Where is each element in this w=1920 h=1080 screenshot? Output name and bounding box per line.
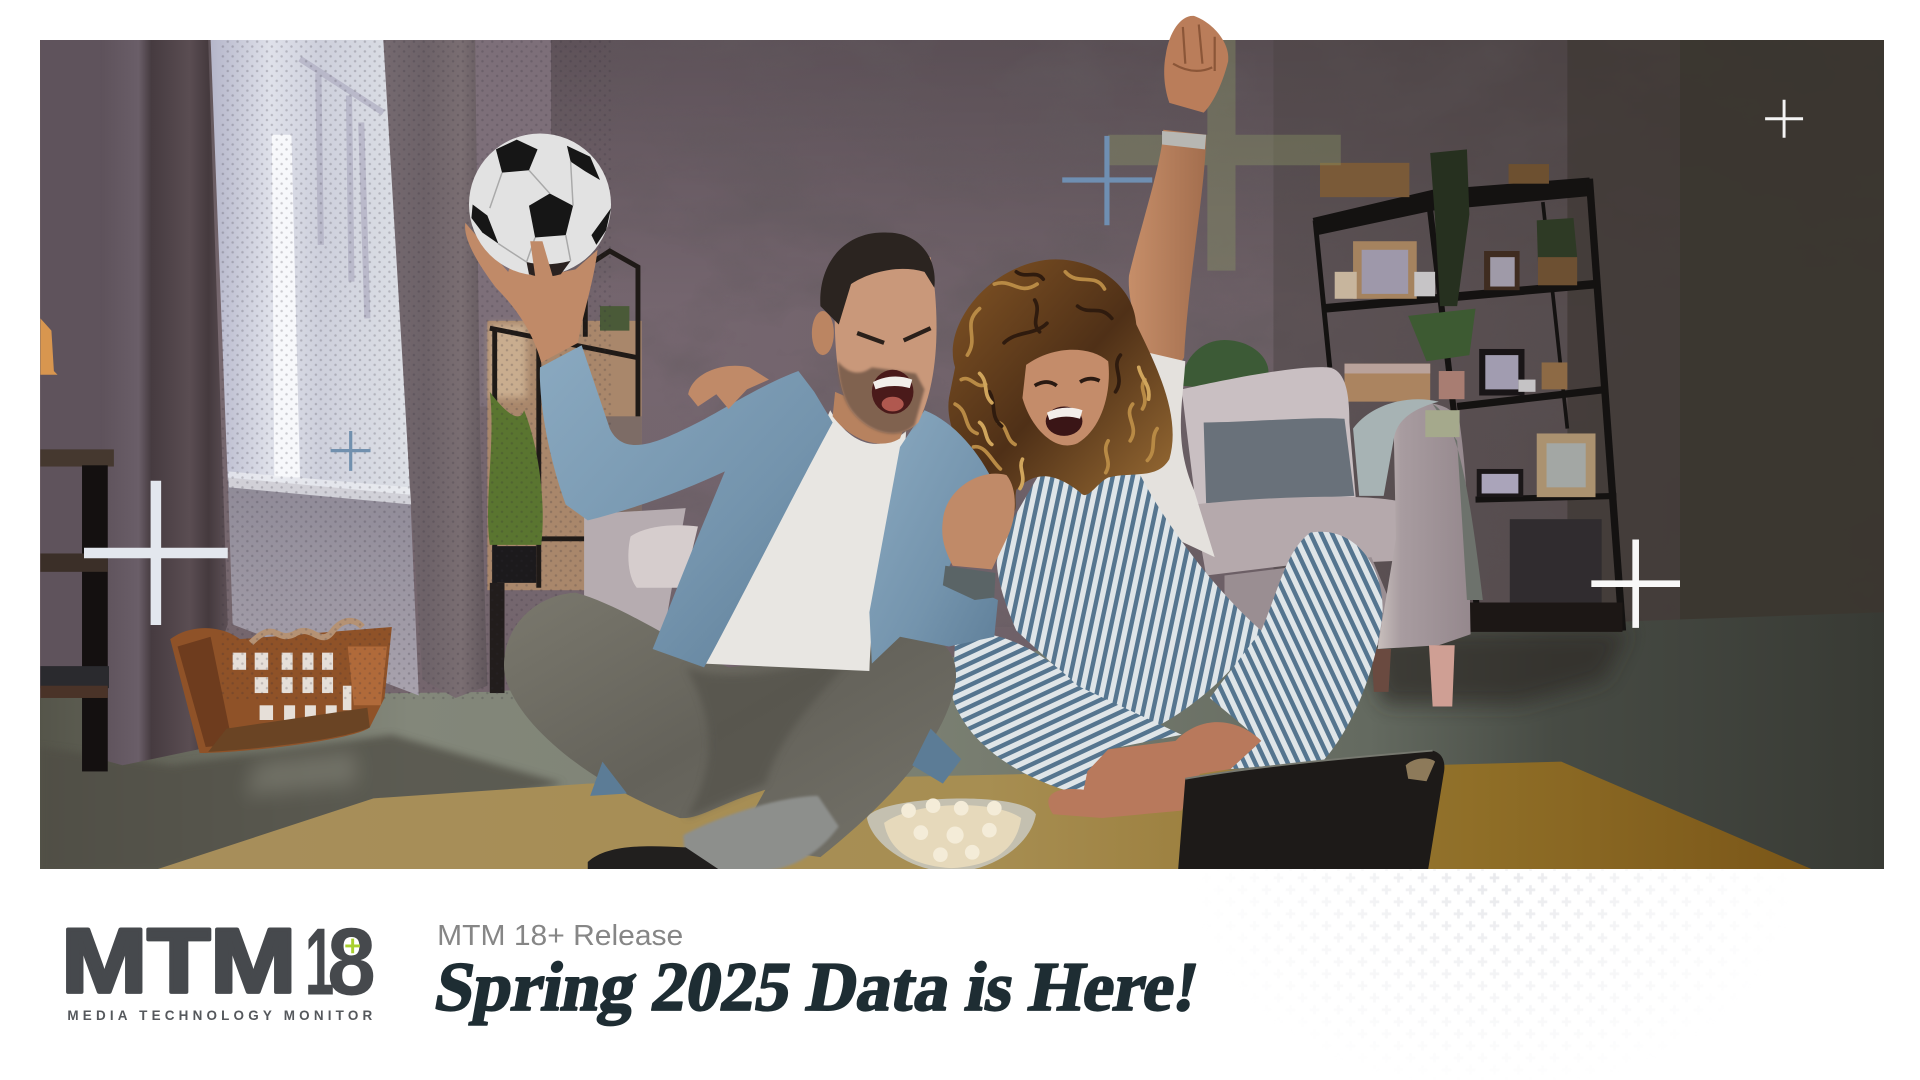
small white plus mark top right (1765, 100, 1803, 138)
finger over ball (530, 241, 553, 284)
man: blue shirt left side and raised sleeve (540, 345, 833, 667)
heading: Spring 2025 Data is Here! (429, 949, 1205, 1026)
blue plus mark on the wall (1062, 136, 1152, 225)
popcorn bowl (867, 798, 1036, 872)
woman (948, 16, 1383, 818)
woman: bare calf and foot (1048, 722, 1261, 818)
dot texture on wall and curtains (220, 39, 612, 700)
man: face (835, 257, 937, 433)
man: neck (833, 392, 906, 444)
window sheer curtain (211, 39, 419, 696)
man: eyes and brows (857, 328, 931, 343)
woman: eyes and open mouth (1035, 379, 1100, 436)
woman: striped overalls (996, 474, 1261, 724)
man: wristwatch (943, 566, 996, 600)
logo tagline: MEDIA TECHNOLOGY MONITOR (67, 1008, 373, 1023)
right shelf unit (1313, 149, 1622, 632)
basket reflection on floor (245, 752, 358, 796)
man: shirt bottom lower edge behind knee (590, 762, 627, 796)
tablet (1178, 751, 1444, 872)
back shelf with warm light (487, 251, 642, 590)
floor shadow under sofa and shelves (1359, 631, 1629, 704)
left side shelf (40, 449, 114, 771)
logo numeral 8: 8 (327, 909, 376, 1015)
woman: raised fist (1164, 16, 1228, 113)
translucent green cross (1108, 39, 1341, 271)
left curtain (100, 39, 228, 765)
woman: white t-shirt (1140, 353, 1214, 557)
white plus mark right (1591, 540, 1680, 628)
pattern: fading plus marks under photo (1322, 870, 1666, 1002)
rug (157, 762, 1812, 869)
man: blue shirt right side and sleeve (869, 410, 998, 664)
logo wordmark MTM: MTM (61, 911, 296, 1012)
man: ear (812, 311, 834, 355)
woman: bracelet (1162, 131, 1206, 149)
man: open mouth (872, 370, 913, 414)
man: hair (820, 233, 935, 324)
logo: MTM 18+ Media Technology Monitor (61, 909, 376, 1023)
soccer ball (469, 133, 611, 277)
woman: right leg trousers (1210, 532, 1383, 769)
large white plus mark (84, 481, 228, 625)
woman: curly hair (948, 259, 1173, 512)
floor (39, 612, 1886, 872)
woman: left leg trousers (953, 633, 1182, 796)
people (465, 16, 1444, 872)
sofa (584, 367, 1483, 707)
logo numeral 1: 1 (305, 909, 334, 1015)
logo green plus (345, 939, 360, 953)
man: sock and foot (588, 796, 839, 872)
wall (39, 39, 1888, 725)
man: t-shirt (704, 410, 906, 671)
man (465, 223, 1015, 872)
blue plus mark in the window (331, 431, 371, 471)
floor shading: dark lower-left corner (39, 735, 563, 872)
man: shirt hem right (912, 729, 961, 784)
woman: raised arm (1128, 130, 1206, 360)
release label: MTM 18+ Release (437, 920, 683, 952)
woman: face (1022, 350, 1109, 445)
man: raised hand (465, 223, 598, 362)
photo panel: living room background (39, 39, 1888, 872)
right curtain (383, 39, 487, 698)
man: stubble beard (838, 361, 924, 434)
plant behind sofa (1182, 340, 1269, 389)
man: raised fist (942, 474, 1015, 569)
potted plant left (488, 392, 543, 693)
man: trousers (504, 593, 956, 857)
laundry basket (170, 621, 392, 753)
woman hand on man's shoulder (688, 366, 769, 409)
candle on left shelf (40, 318, 58, 375)
man: trouser shading (687, 668, 839, 819)
